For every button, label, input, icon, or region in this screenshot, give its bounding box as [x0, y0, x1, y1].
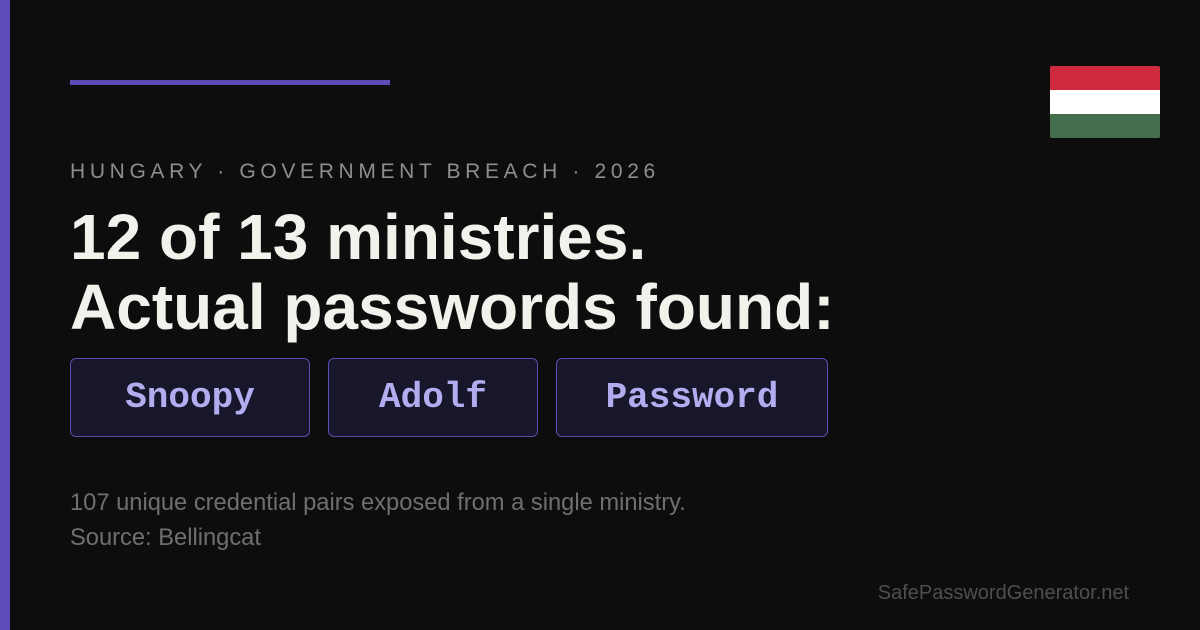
- chip: Adolf: [328, 358, 538, 437]
- chip: Adolf: Adolf: [379, 377, 487, 418]
- title: Actual passwords found:: [70, 271, 834, 343]
- icon: Hungarian flag: [1050, 66, 1160, 138]
- chip: Password: [556, 358, 828, 437]
- chip: Password: Password: [606, 377, 778, 418]
- chip: Snoopy: [70, 358, 310, 437]
- title: [70, 201, 834, 343]
- footnote: 107 unique credential pairs exposed from a single ministry.: [70, 490, 686, 516]
- password chips: [70, 358, 828, 437]
- footnote: [70, 490, 686, 551]
- footnote: Source: Bellingcat: [70, 525, 261, 551]
- top rule: [70, 80, 390, 85]
- kicker: HUNGARY · GOVERNMENT BREACH · 2026: [70, 160, 660, 183]
- chip: Snoopy: Snoopy: [125, 377, 255, 418]
- accent bar: [0, 0, 10, 630]
- title: 12 of 13 ministries.: [70, 201, 646, 273]
- site credit: SafePasswordGenerator.net: [878, 582, 1129, 604]
